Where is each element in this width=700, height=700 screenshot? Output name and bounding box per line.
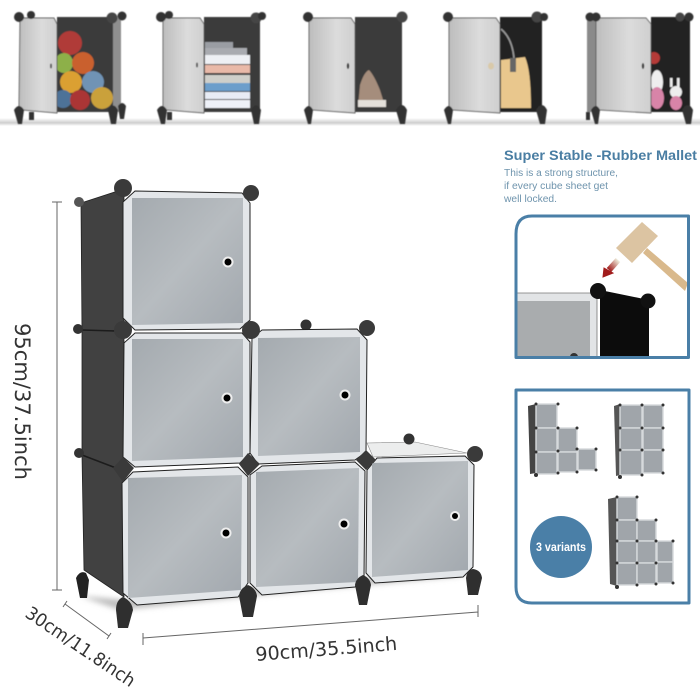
ground shadow [80,570,470,610]
top of right cube [367,442,467,457]
door bottom left [122,467,248,605]
red arrow [603,260,618,277]
mallet [616,222,688,291]
connectors [113,179,483,482]
door middle left [123,333,250,467]
dimension: height: 95cm/37.5inch [10,323,34,480]
variant B [614,404,663,476]
badge: 3 variants [530,516,592,578]
cube with shoe [303,12,408,124]
dimension: depth: 30cm/11.8inch [21,603,139,692]
door right [366,456,474,583]
description text: This is a strong structure, [504,168,618,179]
feet [116,569,482,628]
dimension: width [143,605,478,666]
door top left [123,191,250,330]
door upper middle [250,329,367,464]
heading: Super Stable -Rubber Mallet: Super Stable -Rubber Mallet [504,147,697,163]
cube with plush toys [586,12,694,124]
back screws [73,197,414,458]
main cube shelf [73,179,483,628]
panel: 3 variants [516,390,689,603]
dimension: width: 90cm/35.5inch [255,633,398,666]
cube with handbag [443,12,548,124]
side panel [81,191,124,597]
floor shadow under top row [0,118,700,126]
description text: if every cube sheet get [504,181,608,192]
cube with folded shirts [156,11,266,124]
back foot [76,572,89,598]
badge: 3 variants: 3 variants [536,542,586,554]
variant C [608,497,673,586]
panel: rubber mallet [515,216,688,361]
description text [503,168,618,205]
description text: well locked. [503,194,557,205]
connector dots [534,402,674,589]
cube corner [515,283,656,361]
variant A [528,404,596,474]
dimension: height [10,202,62,590]
cube with yarn balls [14,11,126,124]
door lower middle [250,462,365,595]
